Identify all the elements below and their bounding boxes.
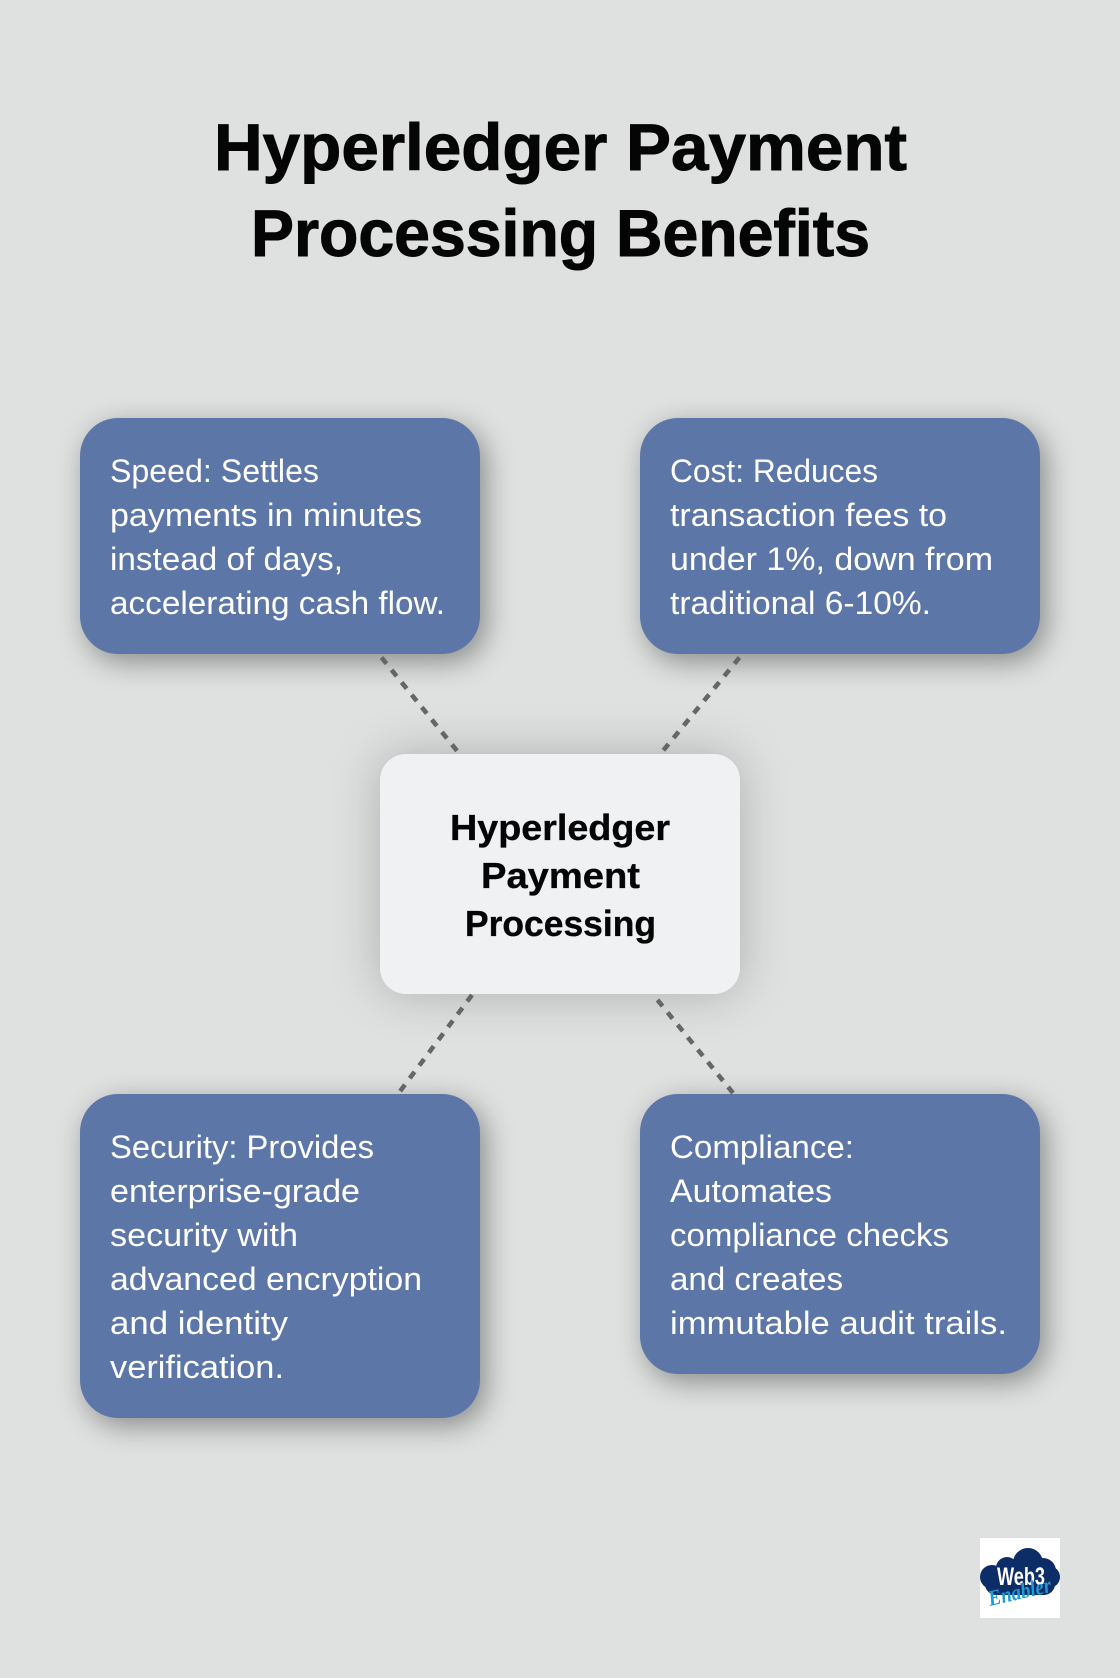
title: [214, 110, 907, 270]
panel: cost: [640, 418, 1040, 654]
security card background: [80, 1094, 480, 1418]
title: Hyperledger Payment: [214, 110, 907, 184]
compliance text: compliance checks: [670, 1217, 949, 1253]
panel: security: [80, 1094, 480, 1418]
panel: compliance: [640, 1094, 1040, 1374]
security text: advanced encryption: [110, 1261, 422, 1297]
cost card background: [640, 418, 1040, 654]
connector: security to center: [398, 995, 472, 1094]
compliance card background: [640, 1094, 1040, 1374]
compliance text: Compliance:: [670, 1129, 854, 1165]
logo: Web3 Enabler: [980, 1538, 1060, 1618]
cost text: traditional 6-10%.: [670, 585, 931, 621]
speed card background: [80, 418, 480, 654]
security text: security with: [110, 1217, 298, 1253]
connector: cost to center: [662, 658, 740, 752]
speed text: [110, 453, 445, 621]
security text: verification.: [110, 1349, 284, 1385]
speed text: instead of days,: [110, 541, 343, 577]
connector: speed to center: [382, 658, 458, 752]
cost text: Cost: Reduces: [670, 453, 878, 489]
center text: Hyperledger: [450, 807, 670, 848]
security text: [110, 1129, 422, 1385]
compliance text: and creates: [670, 1261, 843, 1297]
title: Processing Benefits: [251, 196, 870, 270]
security text: enterprise-grade: [110, 1173, 360, 1209]
compliance text: [670, 1129, 1007, 1341]
security text: and identity: [110, 1305, 288, 1341]
center text: Payment: [481, 855, 640, 896]
logo word: Web3: Web3: [997, 1563, 1045, 1591]
speed text: Speed: Settles: [110, 453, 319, 489]
speed text: payments in minutes: [110, 497, 422, 533]
security text: Security: Provides: [110, 1129, 374, 1165]
cost text: under 1%, down from: [670, 541, 993, 577]
compliance text: immutable audit trails.: [670, 1305, 1007, 1341]
cost text: [670, 453, 993, 621]
panel: speed: [80, 418, 480, 654]
center text: Processing: [465, 903, 656, 944]
center text: [450, 807, 670, 944]
icon: cloud: [980, 1548, 1060, 1595]
center card background: [380, 754, 740, 994]
compliance text: Automates: [670, 1173, 832, 1209]
connector: compliance to center: [658, 1000, 733, 1093]
logo word: Enabler: Enabler: [985, 1572, 1054, 1611]
panel: center node: [380, 754, 740, 994]
speed text: accelerating cash flow.: [110, 585, 445, 621]
cost text: transaction fees to: [670, 497, 947, 533]
logo background: [980, 1538, 1060, 1618]
